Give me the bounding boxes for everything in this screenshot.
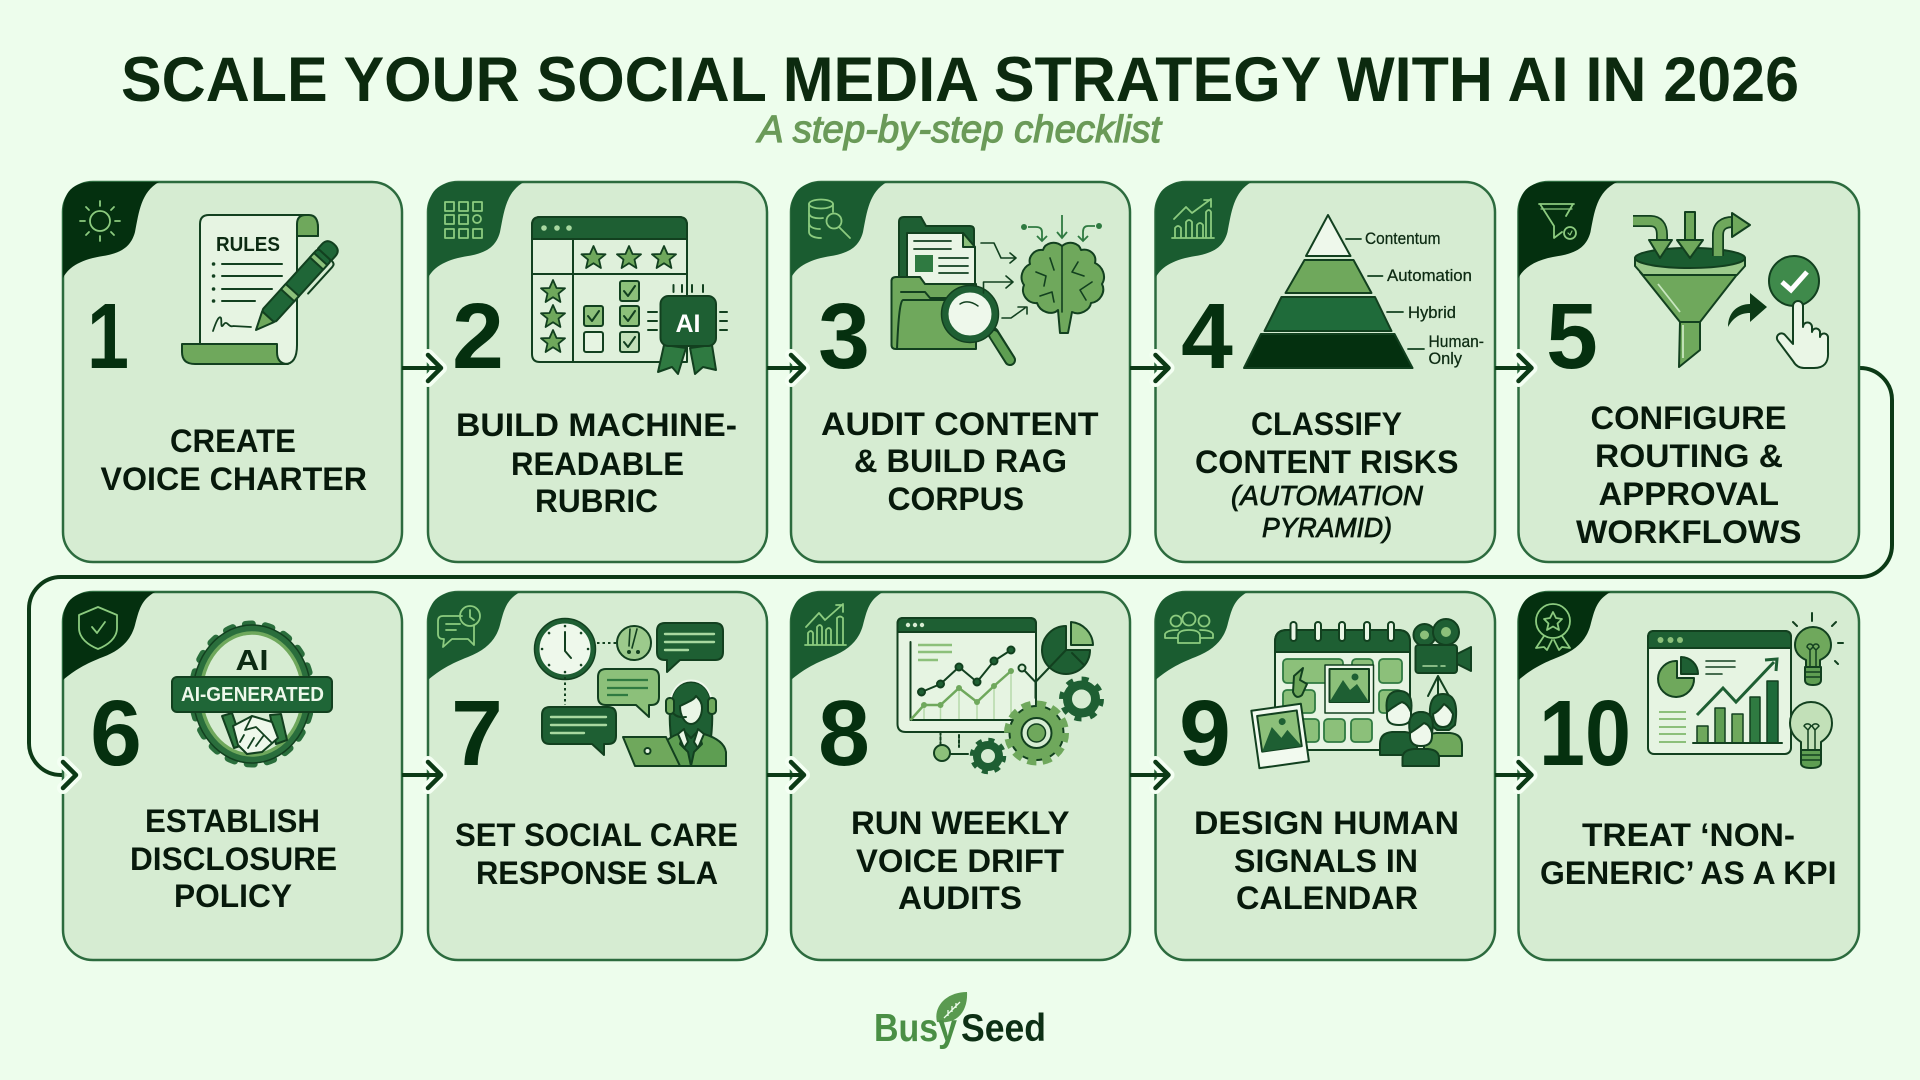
icon: automation pyramid (1244, 215, 1484, 368)
step label: AUDIT CONTENT (821, 406, 1099, 442)
corner tab (791, 592, 883, 680)
subtitle: A step-by-step checklist (756, 109, 1162, 151)
step label: GENERIC’ AS A KPI (1540, 855, 1836, 891)
corner icon: sun (80, 201, 120, 241)
step label (130, 803, 337, 914)
step label: & BUILD RAG (854, 443, 1067, 479)
step label (851, 805, 1070, 916)
step label: AUDITS (898, 880, 1022, 916)
icon: social care agent and chat bubbles (534, 618, 726, 766)
step label: POLICY (174, 878, 292, 914)
step number: 1 (87, 284, 129, 388)
step label: CALENDAR (1236, 880, 1418, 916)
step number: 5 (1546, 284, 1598, 388)
logo: BusySeed: Busy (874, 1007, 957, 1050)
corner tab (63, 592, 155, 680)
icon: rules scroll and pen (182, 215, 344, 364)
step number: 2 (452, 284, 504, 388)
corner icon: checklist grid (445, 202, 482, 238)
icon: automation pyramid: Hybrid (1408, 303, 1456, 322)
corner tab (428, 592, 520, 680)
logo: BusySeed: Seed (961, 1007, 1046, 1050)
step label: CONFIGURE (1590, 400, 1786, 436)
corner tab (428, 182, 524, 278)
icon: routing funnel and approval click (1633, 212, 1828, 368)
step label (455, 817, 738, 891)
panel: step 1 (63, 182, 402, 562)
panel: step 4 (1156, 182, 1495, 562)
icon: automation pyramid: Only (1428, 349, 1462, 368)
corner icon: shield check (79, 607, 117, 649)
corner icon: team (1165, 612, 1213, 643)
step label: SET SOCIAL CARE (455, 817, 738, 853)
icon: KPI dashboard with light bulbs (1648, 613, 1843, 768)
corner tab (1156, 182, 1252, 278)
step number: 4 (1181, 284, 1233, 388)
panel: step 7 (428, 592, 767, 960)
icon: AI-generated badge: AI (236, 645, 268, 677)
icon: automation pyramid: Contentum (1365, 229, 1440, 248)
step number: 8 (818, 681, 870, 785)
step label (1195, 406, 1458, 543)
step label: (AUTOMATION (1231, 480, 1424, 511)
panel: step 9 (1156, 592, 1495, 960)
step label: BUILD MACHINE- (456, 407, 737, 443)
step label (1540, 817, 1836, 891)
corner icon: funnel check (1539, 204, 1576, 239)
step number: 6 (90, 681, 142, 785)
step label (1576, 400, 1802, 550)
panel: step 6 (63, 592, 402, 960)
corner icon: award medal (1536, 604, 1570, 650)
panel: step 5 (1518, 182, 1859, 562)
title: SCALE YOUR SOCIAL MEDIA STRATEGY WITH AI IN 2026 (121, 45, 1799, 115)
step number: 7 (451, 681, 503, 785)
step number: 10 (1539, 681, 1631, 785)
corner icon: growth chart (805, 604, 846, 645)
corner tab (63, 182, 159, 278)
icon: automation pyramid: Human- (1428, 332, 1484, 351)
step label: CORPUS (888, 481, 1024, 517)
corner tab (1156, 592, 1248, 680)
step label: PYRAMID) (1262, 512, 1392, 543)
step label: CONTENT RISKS (1195, 444, 1458, 480)
icon: folder, magnifier and brain (892, 215, 1104, 360)
icon: rubric table with AI badge: AI (676, 310, 700, 338)
connector: card 5 wrapping to card 6 (29, 368, 1892, 775)
arrows between steps (63, 355, 1532, 788)
step label: VOICE DRIFT (856, 843, 1064, 879)
step label: RESPONSE SLA (476, 855, 718, 891)
step label: RUN WEEKLY (851, 805, 1070, 841)
step label: READABLE (511, 446, 684, 482)
step label: CREATE (170, 423, 296, 459)
step label: APPROVAL (1598, 476, 1779, 512)
step label (100, 423, 367, 497)
step label: DISCLOSURE (130, 841, 337, 877)
step label: ESTABLISH (145, 803, 320, 839)
step label: SIGNALS IN (1234, 843, 1418, 879)
panel: step 2 (428, 182, 767, 562)
panel: step 10 (1518, 592, 1859, 960)
step number: 9 (1179, 681, 1231, 785)
step label (456, 407, 737, 519)
logo: BusySeed (874, 992, 1046, 1050)
icon: rubric table with AI badge (532, 217, 727, 374)
corner tab (1518, 592, 1610, 680)
icon: rules scroll and pen: RULES (216, 233, 280, 256)
step number: 3 (818, 284, 870, 388)
corner tab (1518, 182, 1617, 278)
panel: step 8 (791, 592, 1130, 960)
step label: RUBRIC (535, 483, 658, 519)
step label: WORKFLOWS (1576, 514, 1802, 550)
step label: ROUTING & (1595, 438, 1783, 474)
step label (821, 406, 1099, 517)
corner tab (791, 182, 887, 278)
icon: voice drift dashboard and gears (898, 618, 1102, 772)
corner icon: database search (809, 200, 850, 238)
icon: AI-generated badge (172, 624, 332, 764)
corner icon: growth chart (1172, 199, 1214, 238)
icon: automation pyramid: Automation (1387, 266, 1472, 285)
panel: step 3 (791, 182, 1130, 562)
step label: VOICE CHARTER (100, 461, 367, 497)
step label: TREAT ‘NON- (1582, 817, 1795, 853)
icon: content calendar with people and camera (1251, 619, 1471, 768)
step label: DESIGN HUMAN (1194, 805, 1459, 841)
step label (1194, 805, 1459, 916)
step label: CLASSIFY (1251, 406, 1402, 442)
corner icon: chat with clock (438, 606, 480, 647)
icon: AI-generated badge: AI-GENERATED (181, 684, 324, 706)
